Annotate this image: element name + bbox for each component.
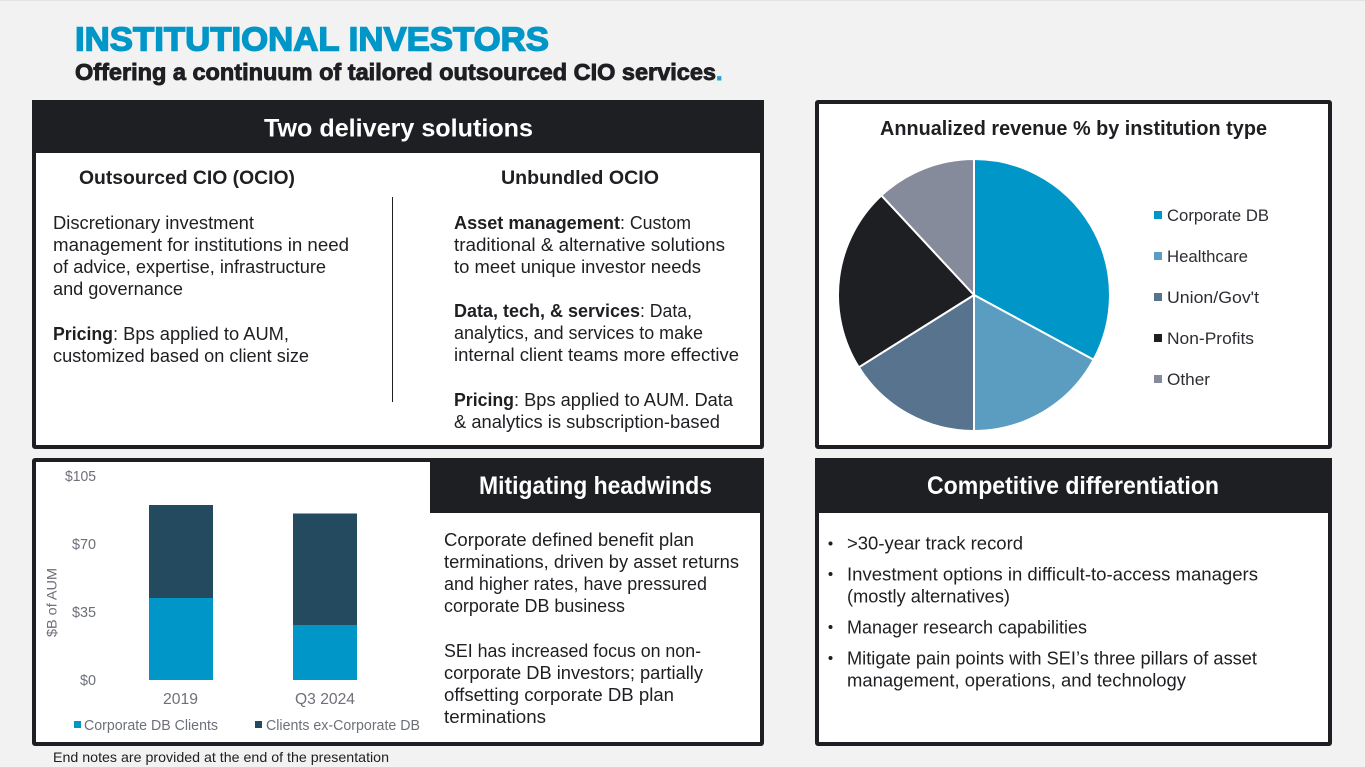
footnote: End notes are provided at the end of the presentation	[53, 749, 389, 765]
y-axis labels: $70	[72, 536, 96, 553]
text block: unbundled pricing: : Bps applied to AUM. Data	[514, 390, 734, 410]
text block: SEI focus: offsetting corporate DB plan	[444, 685, 674, 705]
chart title: Annualized revenue % by institution type	[880, 118, 1267, 140]
text block: asset management: to meet unique investor needs	[454, 257, 701, 277]
stacked bar chart	[44, 468, 420, 734]
text block: data, tech and services	[454, 301, 739, 365]
text block: asset management: traditional & alternative solutions	[454, 235, 725, 255]
bullet list: >30-year track record	[847, 534, 1023, 554]
bullet list: (mostly alternatives)	[847, 586, 1010, 606]
text block: OCIO pricing: Pricing	[53, 324, 113, 344]
text block: headwinds: terminations, driven by asset returns	[444, 552, 739, 572]
bullet list: Manager research capabilities	[847, 618, 1087, 638]
text block: data, tech and services: internal client teams more effective	[454, 345, 739, 365]
text block: asset management: Asset management	[454, 213, 620, 233]
bullet list: management, operations, and technology	[847, 670, 1186, 690]
y-axis title: $B of AUM	[44, 568, 60, 637]
pie legend: Non-Profits	[1167, 330, 1254, 348]
text block: OCIO pricing	[53, 324, 309, 366]
panel header: competitive differentiation: Competitive differentiation	[927, 472, 1219, 500]
text block: data, tech and services: analytics, and services to make	[454, 323, 703, 343]
x-axis labels	[163, 691, 355, 708]
pie chart	[838, 159, 1110, 431]
text block: unbundled pricing	[454, 390, 734, 432]
y-axis labels	[65, 468, 96, 689]
pie legend: Corporate DB	[1167, 207, 1269, 225]
text block: OCIO description: of advice, expertise, infrastructure	[53, 257, 326, 277]
panel: mitigating headwinds	[34, 458, 764, 744]
text block: SEI focus	[444, 641, 703, 727]
chart legend: Clients ex-Corporate DB	[266, 717, 420, 734]
y-axis labels: $0	[80, 672, 96, 689]
pie legend: Union/Gov't	[1167, 289, 1259, 307]
column heading: unbundled OCIO: Unbundled OCIO	[501, 168, 659, 189]
text block: SEI focus: SEI has increased focus on non-	[444, 641, 701, 661]
slice: non-profits	[838, 195, 974, 367]
bullet list: Investment options in difficult-to-access managers	[847, 564, 1258, 584]
text block: headwinds: corporate DB business	[444, 596, 625, 616]
subtitle: .	[716, 59, 723, 85]
text block: headwinds: Corporate defined benefit plan	[444, 530, 694, 550]
pie legend: Other	[1167, 371, 1211, 389]
y-axis labels: $35	[72, 604, 96, 621]
text block: asset management: : Custom	[620, 213, 691, 233]
text block: OCIO description: and governance	[53, 279, 183, 299]
slice: other	[881, 159, 974, 295]
text block: SEI focus: terminations	[444, 707, 546, 727]
pie legend	[1154, 207, 1269, 389]
panel: two delivery solutions	[32, 100, 764, 447]
column heading: outsourced CIO: Outsourced CIO (OCIO)	[79, 168, 295, 189]
bullet list: Mitigate pain points with SEI’s three pillars of asset	[847, 648, 1257, 668]
x-axis labels: 2019	[163, 691, 198, 708]
panel: competitive differentiation	[815, 458, 1332, 744]
text block: OCIO pricing: customized based on client size	[53, 346, 309, 366]
text block: headwinds	[444, 530, 739, 616]
subtitle: Offering a continuum of tailored outsourced CIO services	[75, 59, 716, 85]
panel header: competitive differentiation	[815, 458, 1332, 513]
slice: union/gov't	[859, 295, 974, 431]
pie legend: Healthcare	[1167, 248, 1248, 266]
panel header: mitigating headwinds: Mitigating headwinds	[479, 472, 712, 500]
text block: data, tech and services: : Data,	[640, 301, 692, 321]
panel header: two delivery solutions	[32, 100, 764, 153]
text block: unbundled pricing: & analytics is subscription-based	[454, 412, 720, 432]
chart legend	[74, 717, 420, 734]
slice: healthcare	[974, 295, 1094, 431]
text block: headwinds: and higher rates, have pressured	[444, 574, 707, 594]
bullet list	[828, 534, 1258, 690]
panel: annualized revenue	[817, 102, 1330, 447]
text block: OCIO pricing: : Bps applied to AUM,	[113, 324, 289, 344]
x-axis labels: Q3 2024	[295, 691, 355, 708]
text block: data, tech and services: Data, tech, & services	[454, 301, 640, 321]
text block: SEI focus: corporate DB investors; partially	[444, 663, 703, 683]
panel header: mitigating headwinds	[430, 458, 764, 513]
text block: asset management	[454, 213, 725, 277]
y-axis labels: $105	[65, 468, 96, 485]
title: INSTITUTIONAL INVESTORS	[75, 22, 549, 58]
slice: corporate DB	[974, 159, 1110, 360]
text block: OCIO description	[53, 213, 349, 299]
text block: OCIO description: Discretionary investment	[53, 213, 254, 233]
bar: 2019	[149, 505, 213, 680]
bar: Q3 2024	[293, 514, 357, 680]
text block: unbundled pricing: Pricing	[454, 390, 514, 410]
text block: OCIO description: management for institutions in need	[53, 235, 349, 255]
panel header: two delivery solutions: Two delivery solutions	[264, 114, 533, 142]
chart legend: Corporate DB Clients	[84, 717, 218, 734]
